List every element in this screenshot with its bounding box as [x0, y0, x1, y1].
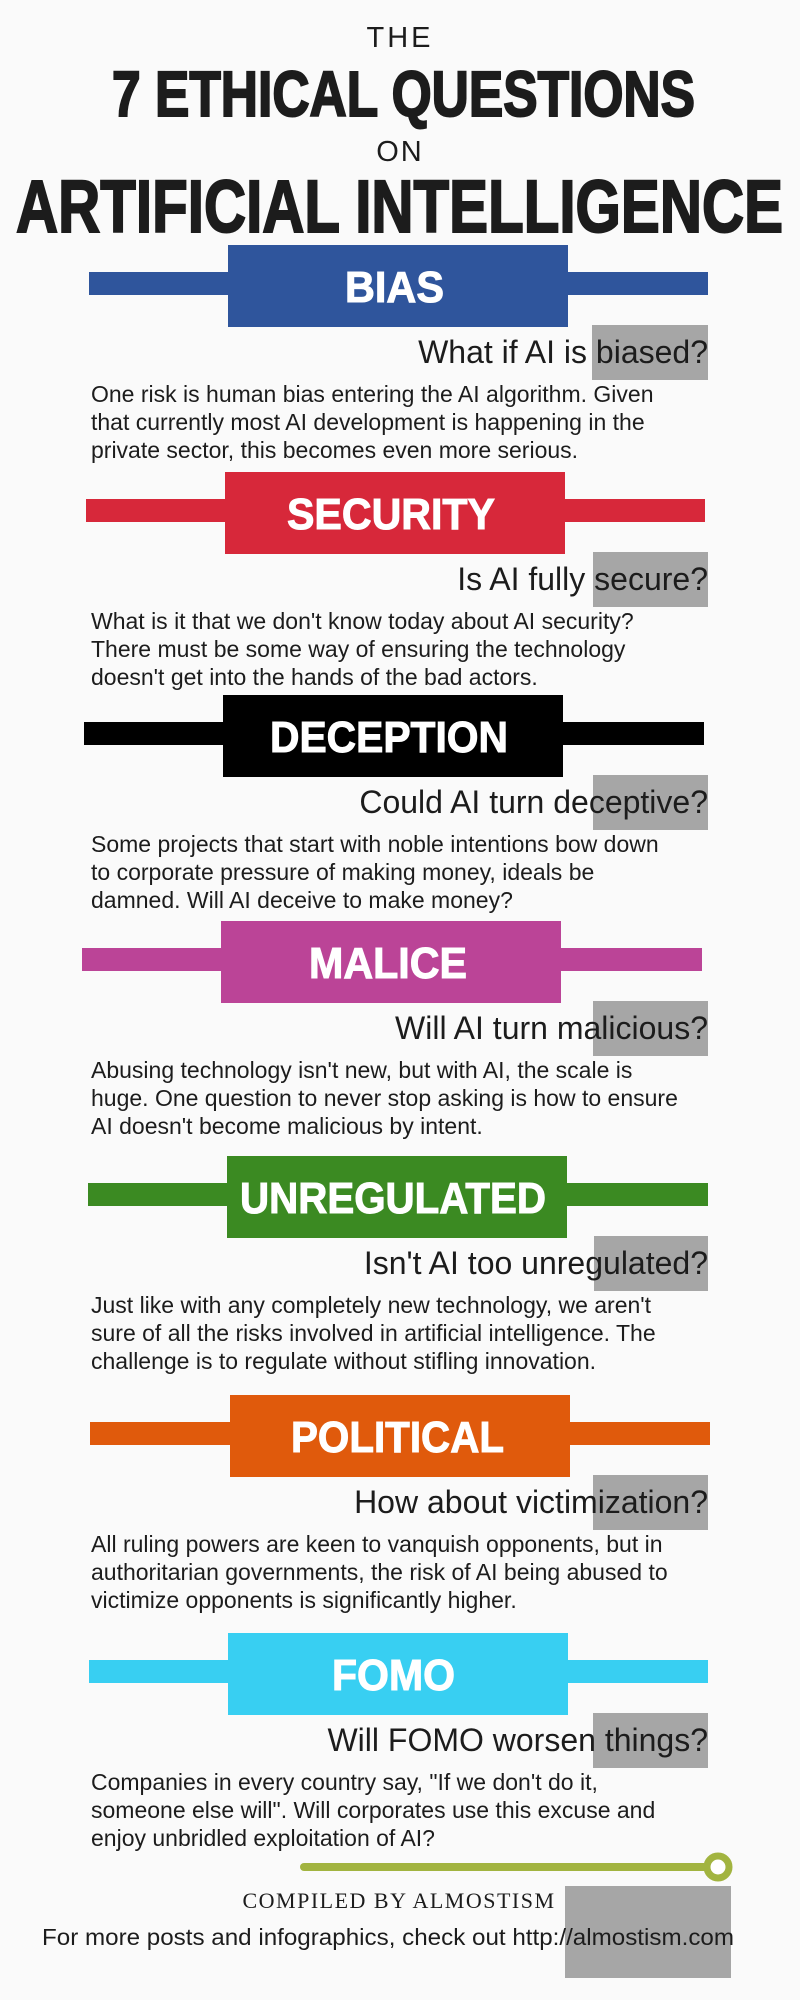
section: fomo: FOMO	[332, 1651, 455, 1700]
section: deception: DECEPTION	[270, 713, 508, 762]
title: THE	[366, 22, 434, 54]
section: bias: private sector, this becomes even more serious.	[91, 437, 578, 463]
divider: green line with ring	[304, 1856, 729, 1878]
section: unregulated: sure of all the risks involved in artificial intelligence. The	[91, 1320, 656, 1346]
section: political: victimize opponents is significantly higher.	[91, 1587, 517, 1613]
section: security: Is AI fully secure?	[457, 561, 708, 597]
section: unregulated: Just like with any completely new technology, we aren't	[91, 1292, 652, 1318]
section: unregulated: Isn't AI too unregulated?	[364, 1245, 708, 1281]
footer: COMPILED BY ALMOSTISM	[242, 1888, 556, 1913]
footer: For more posts and infographics, check out http://almostism.com	[42, 1924, 734, 1950]
section: unregulated: UNREGULATED	[240, 1174, 546, 1223]
section: malice: MALICE	[309, 939, 467, 988]
section: malice: AI doesn't become malicious by intent.	[91, 1113, 483, 1139]
section: malice: Abusing technology isn't new, but with AI, the scale is	[91, 1057, 632, 1083]
section: malice: huge. One question to never stop asking is how to ensure	[91, 1085, 678, 1111]
section: malice: Will AI turn malicious?	[395, 1010, 708, 1046]
section: fomo: someone else will". Will corporates use this excuse and	[91, 1797, 655, 1823]
section: security: doesn't get into the hands of the bad actors.	[91, 664, 538, 690]
section: political: All ruling powers are keen to vanquish opponents, but in	[91, 1531, 663, 1557]
section: malice	[82, 921, 708, 1139]
title	[16, 22, 783, 248]
section: deception	[84, 695, 708, 913]
section: unregulated	[88, 1156, 708, 1374]
section: political	[90, 1395, 710, 1613]
title: ON	[376, 136, 424, 168]
section: deception: to corporate pressure of making money, ideals be	[91, 859, 594, 885]
section: fomo	[89, 1633, 708, 1851]
section: deception: Could AI turn deceptive?	[359, 784, 708, 820]
section: security	[86, 472, 708, 690]
section: political: How about victimization?	[354, 1484, 708, 1520]
section: bias: One risk is human bias entering the AI algorithm. Given	[91, 381, 654, 407]
section: political: POLITICAL	[291, 1413, 504, 1462]
section: bias	[89, 245, 708, 463]
section: bias: BIAS	[345, 263, 444, 312]
section: unregulated: challenge is to regulate without stifling innovation.	[91, 1348, 596, 1374]
section: deception: damned. Will AI deceive to make money?	[91, 887, 513, 913]
section: security: There must be some way of ensuring the technology	[91, 636, 626, 662]
section: fomo: Will FOMO worsen things?	[327, 1722, 708, 1758]
section: deception: Some projects that start with noble intentions bow down	[91, 831, 659, 857]
section: bias: What if AI is biased?	[418, 334, 708, 370]
section: fomo: enjoy unbridled exploitation of AI?	[91, 1825, 435, 1851]
section: fomo: Companies in every country say, "If we don't do it,	[91, 1769, 598, 1795]
section: political: authoritarian governments, the risk of AI being abused to	[91, 1559, 668, 1585]
section: bias: that currently most AI development is happening in the	[91, 409, 645, 435]
section: security: What is it that we don't know today about AI security?	[91, 608, 634, 634]
section: security: SECURITY	[287, 490, 495, 539]
footer	[42, 1886, 734, 1978]
